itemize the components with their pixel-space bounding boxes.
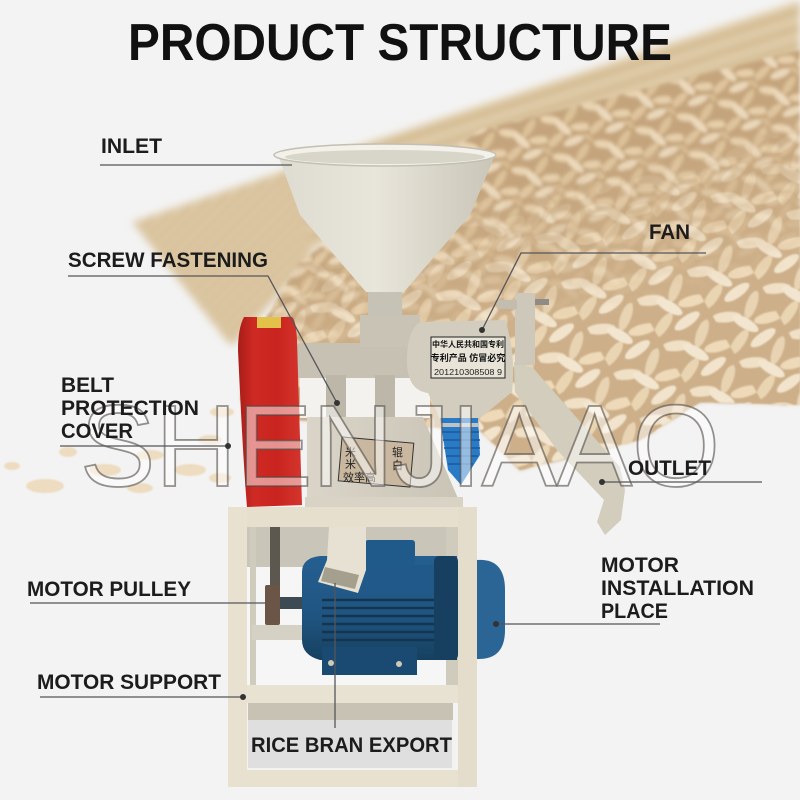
base sticker (338, 437, 414, 487)
label: rice bran export: RICE BRAN EXPORT (251, 734, 452, 757)
base sticker: 辊 (392, 445, 403, 459)
label: belt protection cover (60, 374, 231, 449)
label: screw fastening: SCREW FASTENING (68, 249, 268, 272)
label: motor installation place (493, 554, 754, 627)
base sticker: 米 (345, 458, 356, 471)
machine (228, 144, 625, 787)
red belt cover (238, 317, 302, 507)
label: motor installation place: INSTALLATION (601, 577, 754, 600)
far grains (240, 50, 800, 470)
title: PRODUCT STRUCTURE (128, 14, 672, 72)
label: fan: FAN (649, 221, 690, 244)
patent sticker (431, 337, 505, 378)
base sticker: 白 (392, 458, 403, 472)
background photo: basket and rice grains (4, 0, 800, 493)
loose grains (4, 407, 234, 493)
base body (307, 417, 460, 503)
base sticker: 效率高 (343, 470, 376, 484)
label: motor pulley: MOTOR PULLEY (27, 578, 191, 601)
gap behind barrel (300, 378, 430, 418)
label: belt protection cover: PROTECTION (61, 397, 199, 420)
label: belt protection cover: BELT (61, 374, 114, 397)
label: motor support: MOTOR SUPPORT (37, 671, 221, 694)
basket rim (132, 0, 800, 345)
watermark: SHENJIAAO (80, 381, 720, 511)
barrel (297, 343, 415, 378)
patent sticker: 中华人民共和国专利 (432, 339, 504, 349)
label: fan (479, 221, 706, 333)
patent sticker: 201210308508 9 (434, 368, 503, 377)
base sticker: 米 (345, 446, 356, 459)
label: inlet: INLET (101, 135, 162, 158)
motor (265, 527, 505, 675)
patent sticker: 专利产品 仿冒必究 (431, 352, 505, 363)
label: motor installation place: PLACE (601, 600, 668, 623)
blue bellows (440, 418, 480, 485)
label: outlet (599, 457, 762, 485)
hopper (274, 144, 496, 317)
near grains (240, 130, 800, 470)
round housing (407, 320, 513, 418)
label: motor installation place: MOTOR (601, 554, 679, 577)
label: screw fastening (68, 249, 340, 406)
frame (228, 507, 477, 787)
outlet chute (514, 362, 625, 535)
label: outlet: OUTLET (628, 457, 711, 480)
post (515, 293, 535, 365)
label: belt protection cover: COVER (61, 420, 133, 443)
